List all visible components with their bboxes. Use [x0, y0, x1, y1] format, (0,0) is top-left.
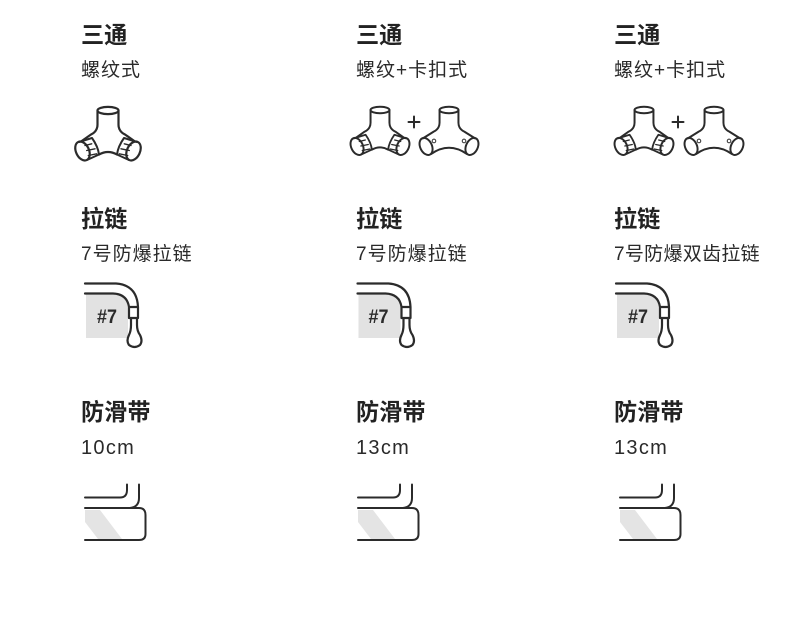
heading: col 2 zipper: 拉链 — [356, 206, 402, 232]
heading: col 3 tee: 三通 — [614, 22, 660, 48]
icon: plus col 3 — [672, 116, 684, 128]
text: col 3 grip strip length: 13cm — [614, 437, 668, 459]
icon: zipper col 1 — [85, 284, 142, 347]
text: col 1 grip strip length: 10cm — [81, 437, 135, 459]
heading: col 1 zipper: 拉链 — [81, 206, 127, 232]
icon: grip strip col 3 — [620, 484, 680, 540]
icon: threaded tee col 2 — [348, 107, 412, 157]
icon: zipper col 2 — [358, 284, 414, 347]
text: col 1 zipper type: 7号防爆拉链 — [81, 244, 193, 265]
heading: col 2 tee: 三通 — [356, 22, 402, 48]
heading: col 3 grip strip: 防滑带 — [614, 399, 684, 425]
heading: col 2 grip strip: 防滑带 — [356, 399, 426, 425]
heading: col 3 zipper: 拉链 — [614, 206, 660, 232]
icon: zipper col 3: #7 — [628, 307, 648, 328]
icon: zipper col 1: #7 — [97, 307, 117, 328]
icon: plus col 2 — [408, 116, 420, 128]
icon: zipper col 3 — [616, 284, 672, 347]
text: col 3 zipper type: 7号防爆双齿拉链 — [614, 244, 760, 265]
icon: zipper col 2: #7 — [368, 307, 388, 328]
icon: threaded tee col 1 — [72, 107, 144, 163]
text: col 2 tee type: 螺纹+卡扣式 — [356, 60, 468, 81]
text: col 2 grip strip length: 13cm — [356, 437, 410, 459]
heading: col 1 grip strip: 防滑带 — [81, 399, 151, 425]
icon: grip strip col 2 — [358, 484, 418, 540]
icon: snap tee col 3 — [682, 107, 746, 157]
text: col 2 zipper type: 7号防爆拉链 — [356, 244, 468, 265]
icon: grip strip col 1 — [85, 484, 146, 540]
text: col 1 tee type: 螺纹式 — [81, 60, 141, 81]
icon: threaded tee col 3 — [612, 107, 676, 157]
icon: snap tee col 2 — [417, 107, 481, 157]
heading: col 1 tee: 三通 — [81, 22, 127, 48]
text: col 3 tee type: 螺纹+卡扣式 — [614, 60, 726, 81]
